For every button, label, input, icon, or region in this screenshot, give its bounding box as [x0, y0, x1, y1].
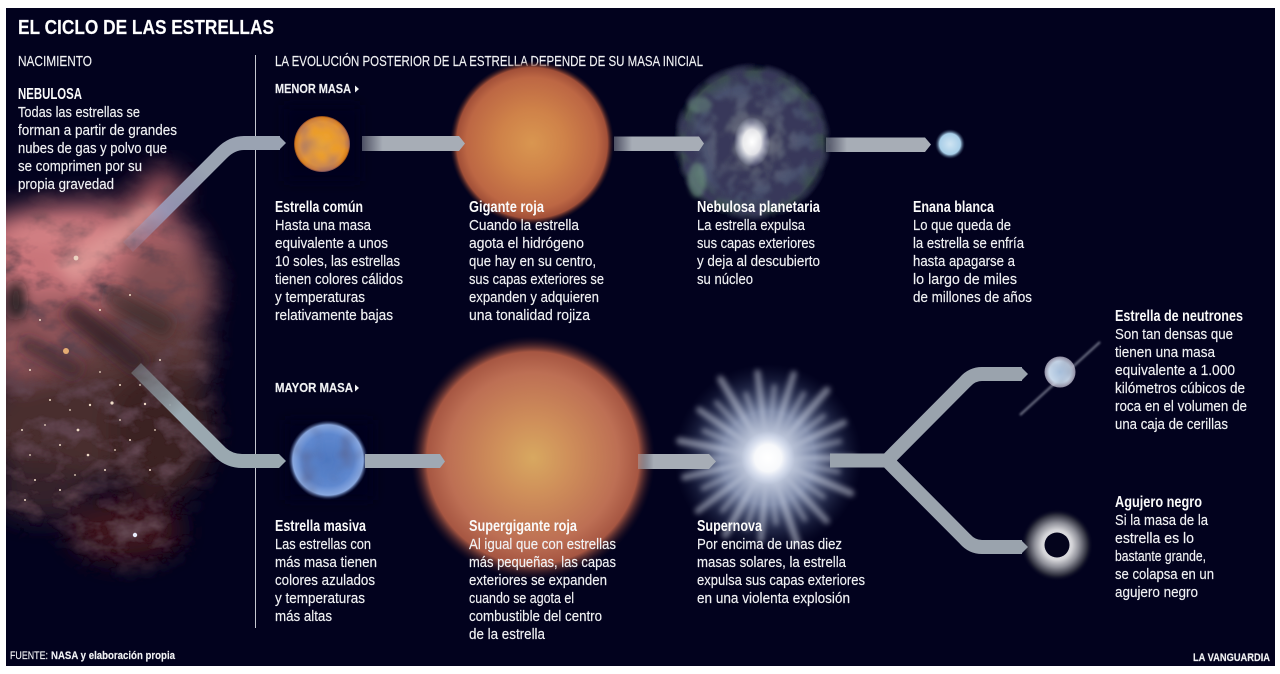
star: nebulosa planetaria	[672, 62, 832, 222]
text: estrella de neutrones: tienen una masa	[1115, 344, 1216, 361]
text: estrella común: tienen colores cálidos	[275, 271, 403, 288]
text: supergigante roja: Supergigante roja	[469, 518, 577, 535]
text: supernova: Supernova	[697, 518, 762, 535]
arrow: nebulosa planetaria to enana blanca	[826, 138, 931, 152]
text: estrella común: Hasta una masa	[275, 217, 372, 234]
arrow: masiva to supergigante	[365, 454, 445, 468]
text: estrella masiva: colores azulados	[275, 572, 375, 589]
text: nebulosa planetaria: La estrella expulsa	[697, 217, 806, 234]
text: gigante roja: sus capas exteriores se	[469, 271, 604, 288]
text: estrella masiva: más masa tienen	[275, 554, 377, 571]
text: agujero negro: estrella es lo	[1115, 530, 1194, 547]
text block: nebulosa: se comprimen por su	[18, 158, 142, 175]
text: nebulosa planetaria: sus capas exteriores	[697, 235, 815, 252]
text block: nebulosa: NEBULOSA	[18, 86, 82, 103]
text: supergigante roja	[469, 518, 616, 643]
text: estrella masiva: más altas	[275, 608, 332, 625]
heading: nacimiento: NACIMIENTO	[18, 53, 92, 70]
arrow: gigante to nebulosa planetaria	[614, 136, 704, 151]
stars in nebula	[21, 256, 171, 537]
star: gigante roja	[450, 61, 614, 225]
star: supernova	[674, 364, 862, 552]
text: estrella de neutrones: una caja de cerillas	[1115, 416, 1228, 433]
title: EL CICLO DE LAS ESTRELLAS	[18, 17, 274, 39]
text: estrella masiva: Las estrellas con	[275, 536, 371, 553]
text: enana blanca: de millones de años	[913, 289, 1032, 306]
star: estrella común	[284, 105, 360, 181]
text: supernova	[697, 518, 865, 607]
text: estrella masiva	[275, 518, 377, 625]
text: estrella común	[275, 199, 403, 324]
text: agujero negro: bastante grande,	[1115, 548, 1206, 565]
text: estrella común: Estrella común	[275, 199, 363, 216]
text: agujero negro: Si la masa de la	[1115, 512, 1209, 529]
text: estrella común: y temperaturas	[275, 289, 365, 306]
text: estrella de neutrones: Estrella de neutrones	[1115, 308, 1243, 325]
star: neutrones	[1020, 342, 1100, 415]
footer: fuente: NASA y elaboración propia	[51, 650, 176, 662]
text: agujero negro: agujero negro	[1115, 584, 1198, 601]
text: supernova: expulsa sus capas exteriores	[697, 572, 865, 589]
star: agujero negro	[1021, 509, 1093, 581]
text: agujero negro: Agujero negro	[1115, 494, 1202, 511]
text block: nebulosa: Todas las estrellas se	[18, 104, 140, 121]
arrow: nebula to estrella masiva	[136, 368, 286, 468]
image: pink nebula	[0, 165, 215, 562]
text: supergigante roja: exteriores se expanden	[469, 572, 607, 589]
footer: fuente	[10, 650, 176, 662]
text: nebulosa planetaria: y deja al descubierto	[697, 253, 820, 270]
divider line	[254, 55, 256, 628]
text: estrella de neutrones: kilómetros cúbicos de	[1115, 380, 1245, 397]
star: enana blanca	[935, 129, 965, 159]
text block: nebulosa: nubes de gas y polvo que	[18, 140, 167, 157]
text: supergigante roja: cuando se agota el	[469, 590, 574, 607]
text: estrella masiva: y temperaturas	[275, 590, 365, 607]
text: enana blanca: la estrella se enfría	[913, 235, 1025, 252]
text: gigante roja: Gigante roja	[469, 199, 544, 216]
text: estrella común: 10 soles, las estrellas	[275, 253, 400, 270]
text block: nebulosa	[18, 86, 177, 193]
label: menor masa: MENOR MASA	[275, 81, 352, 96]
text: supergigante roja: más pequeñas, las capas	[469, 554, 616, 571]
arrow: nebula to estrella común	[128, 136, 286, 247]
heading: evolución: LA EVOLUCIÓN POSTERIOR DE LA ESTRELLA DEPENDE DE SU MASA INICIAL	[275, 53, 703, 70]
text: gigante roja	[469, 199, 604, 324]
text: estrella común: relativamente bajas	[275, 307, 393, 324]
text block: nebulosa: forman a partir de grandes	[18, 122, 177, 139]
text: supernova: masas solares, la estrella	[697, 554, 847, 571]
text: supergigante roja: Al igual que con estrellas	[469, 536, 616, 553]
text: estrella masiva: Estrella masiva	[275, 518, 366, 535]
text: supergigante roja: combustible del centro	[469, 608, 602, 625]
text: gigante roja: Cuando la estrella	[469, 217, 580, 234]
text: enana blanca	[913, 199, 1032, 306]
star: supergigante roja	[411, 336, 655, 580]
text: agujero negro: se colapsa en un	[1115, 566, 1214, 583]
text: nebulosa planetaria: Nebulosa planetaria	[697, 199, 820, 216]
star: estrella masiva	[285, 420, 373, 500]
text: agujero negro	[1115, 494, 1214, 601]
arrow: común to gigante	[362, 136, 465, 151]
text: enana blanca: Enana blanca	[913, 199, 994, 216]
text block: nebulosa: propia gravedad	[18, 176, 114, 193]
text: gigante roja: agota el hidrógeno	[469, 235, 584, 252]
text: nebulosa planetaria	[697, 199, 820, 288]
text: enana blanca: hasta apagarse a	[913, 253, 1016, 270]
text: estrella de neutrones: equivalente a 1.000	[1115, 362, 1235, 379]
text: supergigante roja: de la estrella	[469, 626, 546, 643]
text: nebulosa planetaria: su núcleo	[697, 271, 753, 288]
text: gigante roja: que hay en su centro,	[469, 253, 596, 270]
text: estrella común: equivalente a unos	[275, 235, 388, 252]
arrow: fork from supernova	[830, 367, 1028, 554]
text: estrella de neutrones	[1115, 308, 1247, 433]
text: supernova: en una violenta explosión	[697, 590, 850, 607]
text: enana blanca: lo largo de miles	[913, 271, 1017, 288]
text: gigante roja: una tonalidad rojiza	[469, 307, 591, 324]
label: mayor masa: MAYOR MASA	[275, 380, 354, 395]
arrow: supergigante to supernova	[638, 454, 716, 469]
text: estrella de neutrones: Son tan densas que	[1115, 326, 1233, 343]
text: supernova: Por encima de unas diez	[697, 536, 842, 553]
text: enana blanca: Lo que queda de	[913, 217, 1011, 234]
text: estrella de neutrones: roca en el volumen de	[1115, 398, 1247, 415]
text: gigante roja: expanden y adquieren	[469, 289, 599, 306]
footer: fuente: FUENTE:	[10, 650, 48, 662]
